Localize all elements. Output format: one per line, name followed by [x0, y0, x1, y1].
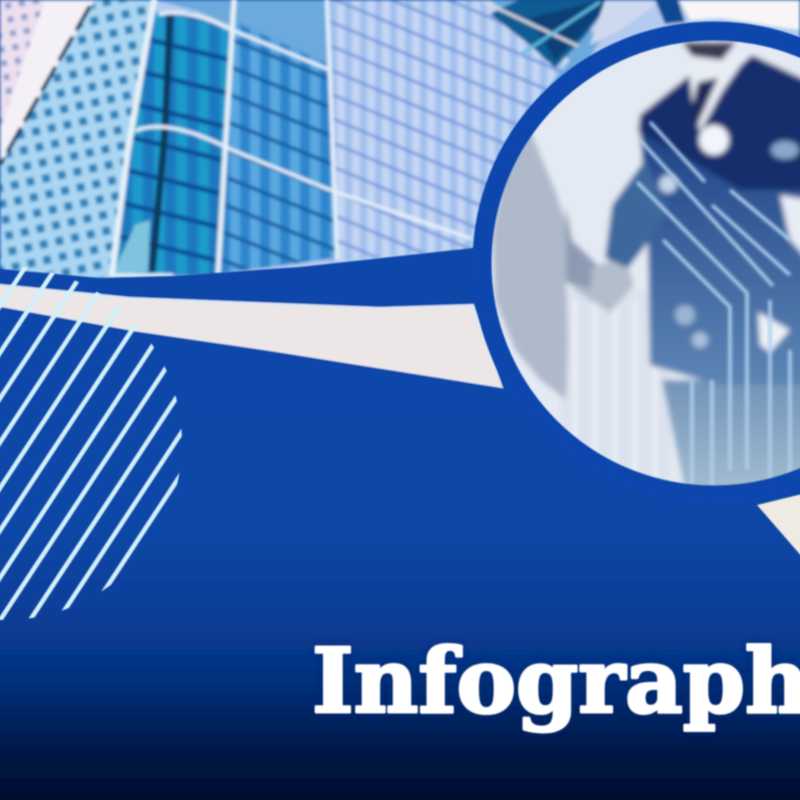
left person sleeve: [566, 205, 600, 290]
left distant tower: [0, 0, 45, 130]
dark upper jacket: [638, 55, 800, 190]
suit arm: [605, 160, 668, 268]
dark corner column: [152, 15, 170, 272]
middle blue facade: [220, 20, 336, 274]
white building struts: [112, 0, 470, 275]
top right dark glass: [490, 0, 612, 68]
suit jacket: [640, 130, 800, 385]
blue band: [0, 240, 520, 420]
lower corner glass: [112, 220, 150, 276]
circular photo: business handshake: [480, 30, 800, 500]
corner teal facade: [112, 12, 233, 276]
dark suit legs: [662, 380, 800, 495]
dark dashed edge: [0, 6, 90, 165]
top right pale windows: [330, 0, 570, 110]
glowing light spots: [699, 125, 729, 155]
top right pale block: [590, 0, 662, 45]
chin and head: [682, 42, 736, 60]
cream ribbon: [0, 284, 502, 388]
striped circle: [0, 266, 183, 621]
photo background: [480, 30, 800, 500]
title: Infograph: [312, 628, 800, 733]
title: Infograph: [312, 628, 800, 733]
right pale facade: [330, 30, 550, 262]
white corner sky: [680, 0, 800, 30]
dark blue corner strip: [655, 0, 685, 24]
blue ring: [482, 31, 800, 495]
pale city strip: [564, 294, 668, 478]
tie: [690, 78, 718, 128]
main blue panel: [0, 240, 800, 800]
hands: [590, 255, 634, 313]
left person: [492, 134, 596, 400]
background skyscraper photo: [0, 0, 800, 300]
white sky strip: [0, 0, 95, 165]
white gap beside arm: [780, 195, 800, 262]
white shirt: [684, 64, 744, 134]
left tower facade: [0, 0, 155, 280]
circuit lines: [637, 122, 790, 485]
top light facade: [155, 0, 600, 110]
white shirt cuff: [758, 312, 790, 352]
right side cream wedge: [757, 492, 800, 566]
lower blue body: [0, 305, 800, 800]
